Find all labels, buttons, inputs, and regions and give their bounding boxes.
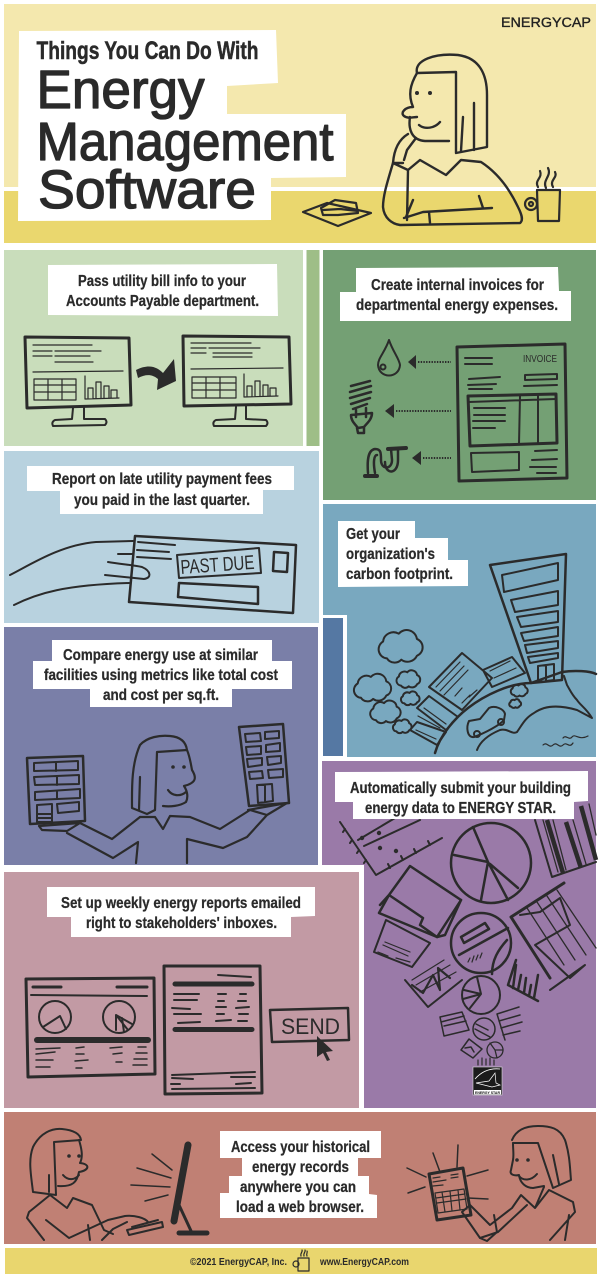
panel: historical records — [4, 1112, 596, 1244]
callout text: energy records — [252, 1159, 349, 1176]
title block: Things You Can Do With — [36, 37, 258, 65]
icon: tiny chart — [461, 1039, 482, 1058]
callout text: Create internal invoices for — [371, 277, 544, 294]
callout text: Get your — [346, 526, 400, 543]
callout text: organization's — [346, 546, 435, 563]
icon: clouds — [354, 630, 528, 733]
logo: EnergyCAP: ENERGYCAP — [501, 15, 591, 30]
icon: skyscraper — [490, 554, 566, 683]
footer: ©2021 EnergyCAP, Inc. — [190, 1256, 287, 1268]
icon: small folder — [440, 1012, 469, 1036]
arrow: to gas — [412, 451, 451, 465]
illustration: woman holding buildings — [39, 736, 287, 863]
callout text: load a web browser. — [236, 1199, 364, 1216]
icon: invoice document — [457, 344, 567, 481]
chart: small bars — [508, 960, 538, 1001]
logo: Energy Star — [473, 1067, 502, 1095]
callout text: departmental energy expenses. — [356, 297, 558, 314]
callout text: Accounts Payable department. — [66, 293, 259, 310]
panel: energy star — [322, 761, 596, 1108]
callout text: anywhere you can — [240, 1179, 356, 1196]
chart: tiny pie — [487, 1042, 503, 1058]
accent block — [320, 615, 347, 757]
icon: past due envelope in hand: PAST DUE — [180, 552, 255, 579]
callout text: Access your historical — [231, 1139, 370, 1156]
icon: destination monitor — [183, 336, 291, 426]
footer — [5, 1248, 597, 1274]
illustration: woman with tablet — [462, 1126, 575, 1241]
callout text: Pass utility bill info to your — [78, 273, 246, 290]
panel: compare facilities — [4, 627, 318, 865]
icon: bar chart large — [535, 804, 596, 877]
icon: small report — [497, 1007, 522, 1040]
panel: accounts payable — [4, 250, 320, 446]
callout text — [220, 1131, 381, 1218]
callout text: facilities using metrics like total cost — [44, 667, 278, 684]
panel: internal invoices — [323, 250, 596, 500]
callout text: energy data to ENERGY STAR. — [365, 800, 556, 817]
icon: coffee mug — [525, 168, 560, 221]
callout text — [338, 521, 468, 587]
icon: report document — [164, 966, 262, 1094]
logo: Energy Star: ENERGY STAR — [475, 1090, 500, 1095]
callout text — [27, 466, 294, 514]
icon: source monitor — [25, 337, 131, 426]
icon: city on globe — [410, 653, 596, 753]
icon: heat lines — [478, 1058, 494, 1065]
icon: past due envelope in hand — [10, 536, 296, 613]
panel: late fees — [4, 451, 319, 623]
icon: scatter chart — [340, 818, 442, 875]
icon: round bill — [451, 913, 511, 974]
icon: gas pipe — [365, 448, 406, 476]
panel: weekly reports — [4, 872, 359, 1108]
callout text: right to stakeholders' inboxes. — [86, 915, 277, 932]
icon: light bulb — [350, 381, 372, 433]
callout text: Report on late utility payment fees — [52, 471, 272, 488]
icon: folder — [374, 866, 461, 967]
icon: small line chart — [405, 960, 462, 1007]
button: send — [270, 1008, 349, 1061]
icon: desktop monitor — [131, 1145, 207, 1233]
icon: plate with sandwich — [303, 200, 371, 226]
chart: pie large — [451, 823, 531, 903]
callout text — [335, 771, 588, 819]
icon: right building — [239, 724, 289, 806]
illustration: woman at computer — [27, 1129, 163, 1240]
icon: line chart — [511, 883, 596, 990]
icon: tablet — [407, 1145, 488, 1220]
callout text — [47, 887, 315, 937]
icon: invoice document: INVOICE — [523, 354, 557, 365]
button: send: SEND — [281, 1014, 340, 1039]
chart: small pie — [462, 976, 500, 1014]
callout text: and cost per sq.ft. — [103, 687, 219, 704]
callout text — [48, 264, 278, 316]
footer: www.EnergyCAP.com — [319, 1256, 409, 1268]
panel: carbon footprint — [320, 504, 596, 757]
icon: cursor — [317, 1036, 333, 1061]
icon: left building — [27, 756, 85, 824]
icon: tiny round bill — [473, 1018, 495, 1040]
title block: Energy — [36, 60, 204, 120]
arrow: to electricity — [385, 404, 451, 418]
title block: Management — [36, 112, 334, 172]
eyes — [415, 91, 432, 95]
panel: header — [4, 4, 596, 243]
callout text: Set up weekly energy reports emailed — [61, 895, 301, 912]
icon: report with pie charts — [26, 978, 155, 1077]
callout text — [340, 267, 571, 321]
title block: Software — [38, 160, 256, 220]
callout text — [33, 640, 292, 707]
arrow: transfer — [136, 359, 176, 390]
callout text: Compare energy use at similar — [63, 647, 258, 664]
callout text: you paid in the last quarter. — [74, 492, 250, 509]
icon: water drop — [378, 340, 400, 376]
title block — [18, 30, 346, 221]
callout text: carbon footprint. — [346, 566, 453, 583]
icon: footer mug — [293, 1250, 309, 1271]
eyes — [171, 765, 186, 769]
arrow: to water — [408, 355, 451, 369]
illustration: woman at desk — [383, 55, 522, 225]
